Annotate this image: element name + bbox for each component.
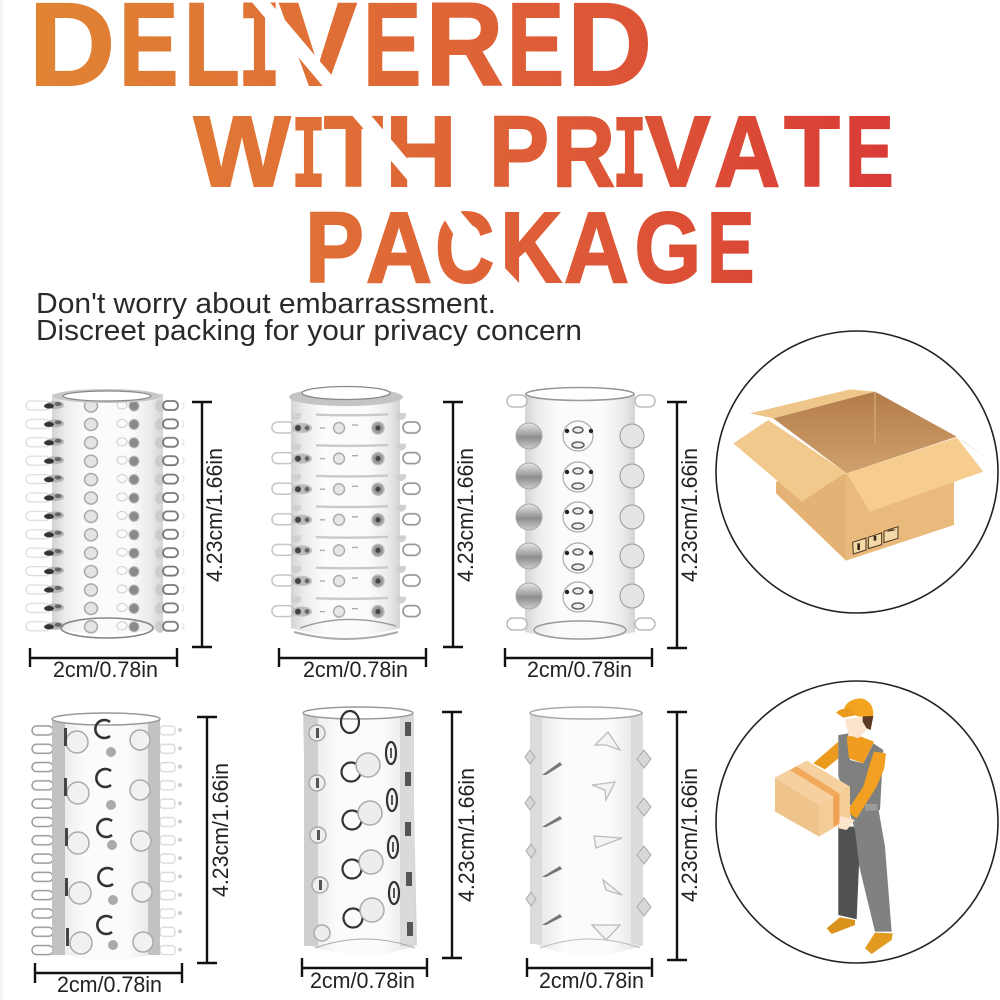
height dimension 1 [192,402,227,647]
title line 2: H [385,96,457,208]
title line 2: P [489,96,549,208]
title line 2: T [784,96,840,208]
title line 3: E [707,192,754,304]
circle: delivery worker [716,681,998,963]
subtitle line 1: Don't worry about embarrassment. [36,288,496,320]
width dimension 5 [302,958,427,993]
height dimension 3 [667,402,702,648]
title line 3: A [564,192,629,304]
width dimension 1: 2cm/0.78in [53,657,158,682]
title line 3 [305,192,754,304]
title line 2 [194,96,893,217]
title line 2: W [194,96,291,208]
height dimension 4 [197,717,233,963]
title line 2: R [552,96,615,208]
product 6: sleeve with star spikes [525,707,651,955]
height dimension 6: 4.23cm/1.66in [677,768,702,902]
product 4: sleeve with rings and loops [30,713,186,960]
height dimension 2: 4.23cm/1.66in [453,448,478,582]
height dimension 3: 4.23cm/1.66in [677,448,702,582]
title line 2: I [613,100,646,217]
width dimension 2 [279,648,426,682]
width dimension 2: 2cm/0.78in [303,657,408,682]
height dimension 2 [443,402,478,647]
height dimension 4: 4.23cm/1.66in [208,763,233,897]
icon: open box [733,389,990,561]
icon: worker carrying box [775,698,893,954]
width dimension 5: 2cm/0.78in [310,968,415,993]
width dimension 1 [30,648,177,682]
title line 3: G [634,192,701,304]
title line 3: K [500,192,562,304]
title cut marks [250,0,521,285]
product 2: ribbed sleeve [271,386,424,639]
left edge strip [0,0,3,1000]
title line 2: V [645,96,711,208]
title line 2: A [714,96,780,208]
width dimension 6 [527,958,652,993]
width dimension 4 [35,963,182,997]
title [29,0,893,304]
product 3: sleeve with beads [507,388,655,639]
height dimension 5: 4.23cm/1.66in [454,768,479,902]
title line 3: A [366,192,432,304]
height dimension 1: 4.23cm/1.66in [202,448,227,582]
height dimension 5 [442,712,479,958]
title line 2: T [324,96,383,208]
width dimension 6: 2cm/0.78in [539,968,644,993]
product 5: sleeve with paired bubbles [303,707,417,955]
height dimension 6 [667,712,702,960]
width dimension 3: 2cm/0.78in [527,657,632,682]
product 1: sleeve with nubs and loops [25,389,189,638]
title line 2: I [292,100,325,217]
subtitle line 2: Discreet packing for your privacy concern [36,315,582,347]
title line 3: P [305,192,364,304]
subtitle [36,288,582,347]
circle: open cardboard box [716,331,998,613]
title line 2: E [845,96,893,208]
title line 1 [29,0,652,122]
title line 3: C [435,192,494,304]
width dimension 4: 2cm/0.78in [57,972,162,997]
width dimension 3 [505,648,652,682]
